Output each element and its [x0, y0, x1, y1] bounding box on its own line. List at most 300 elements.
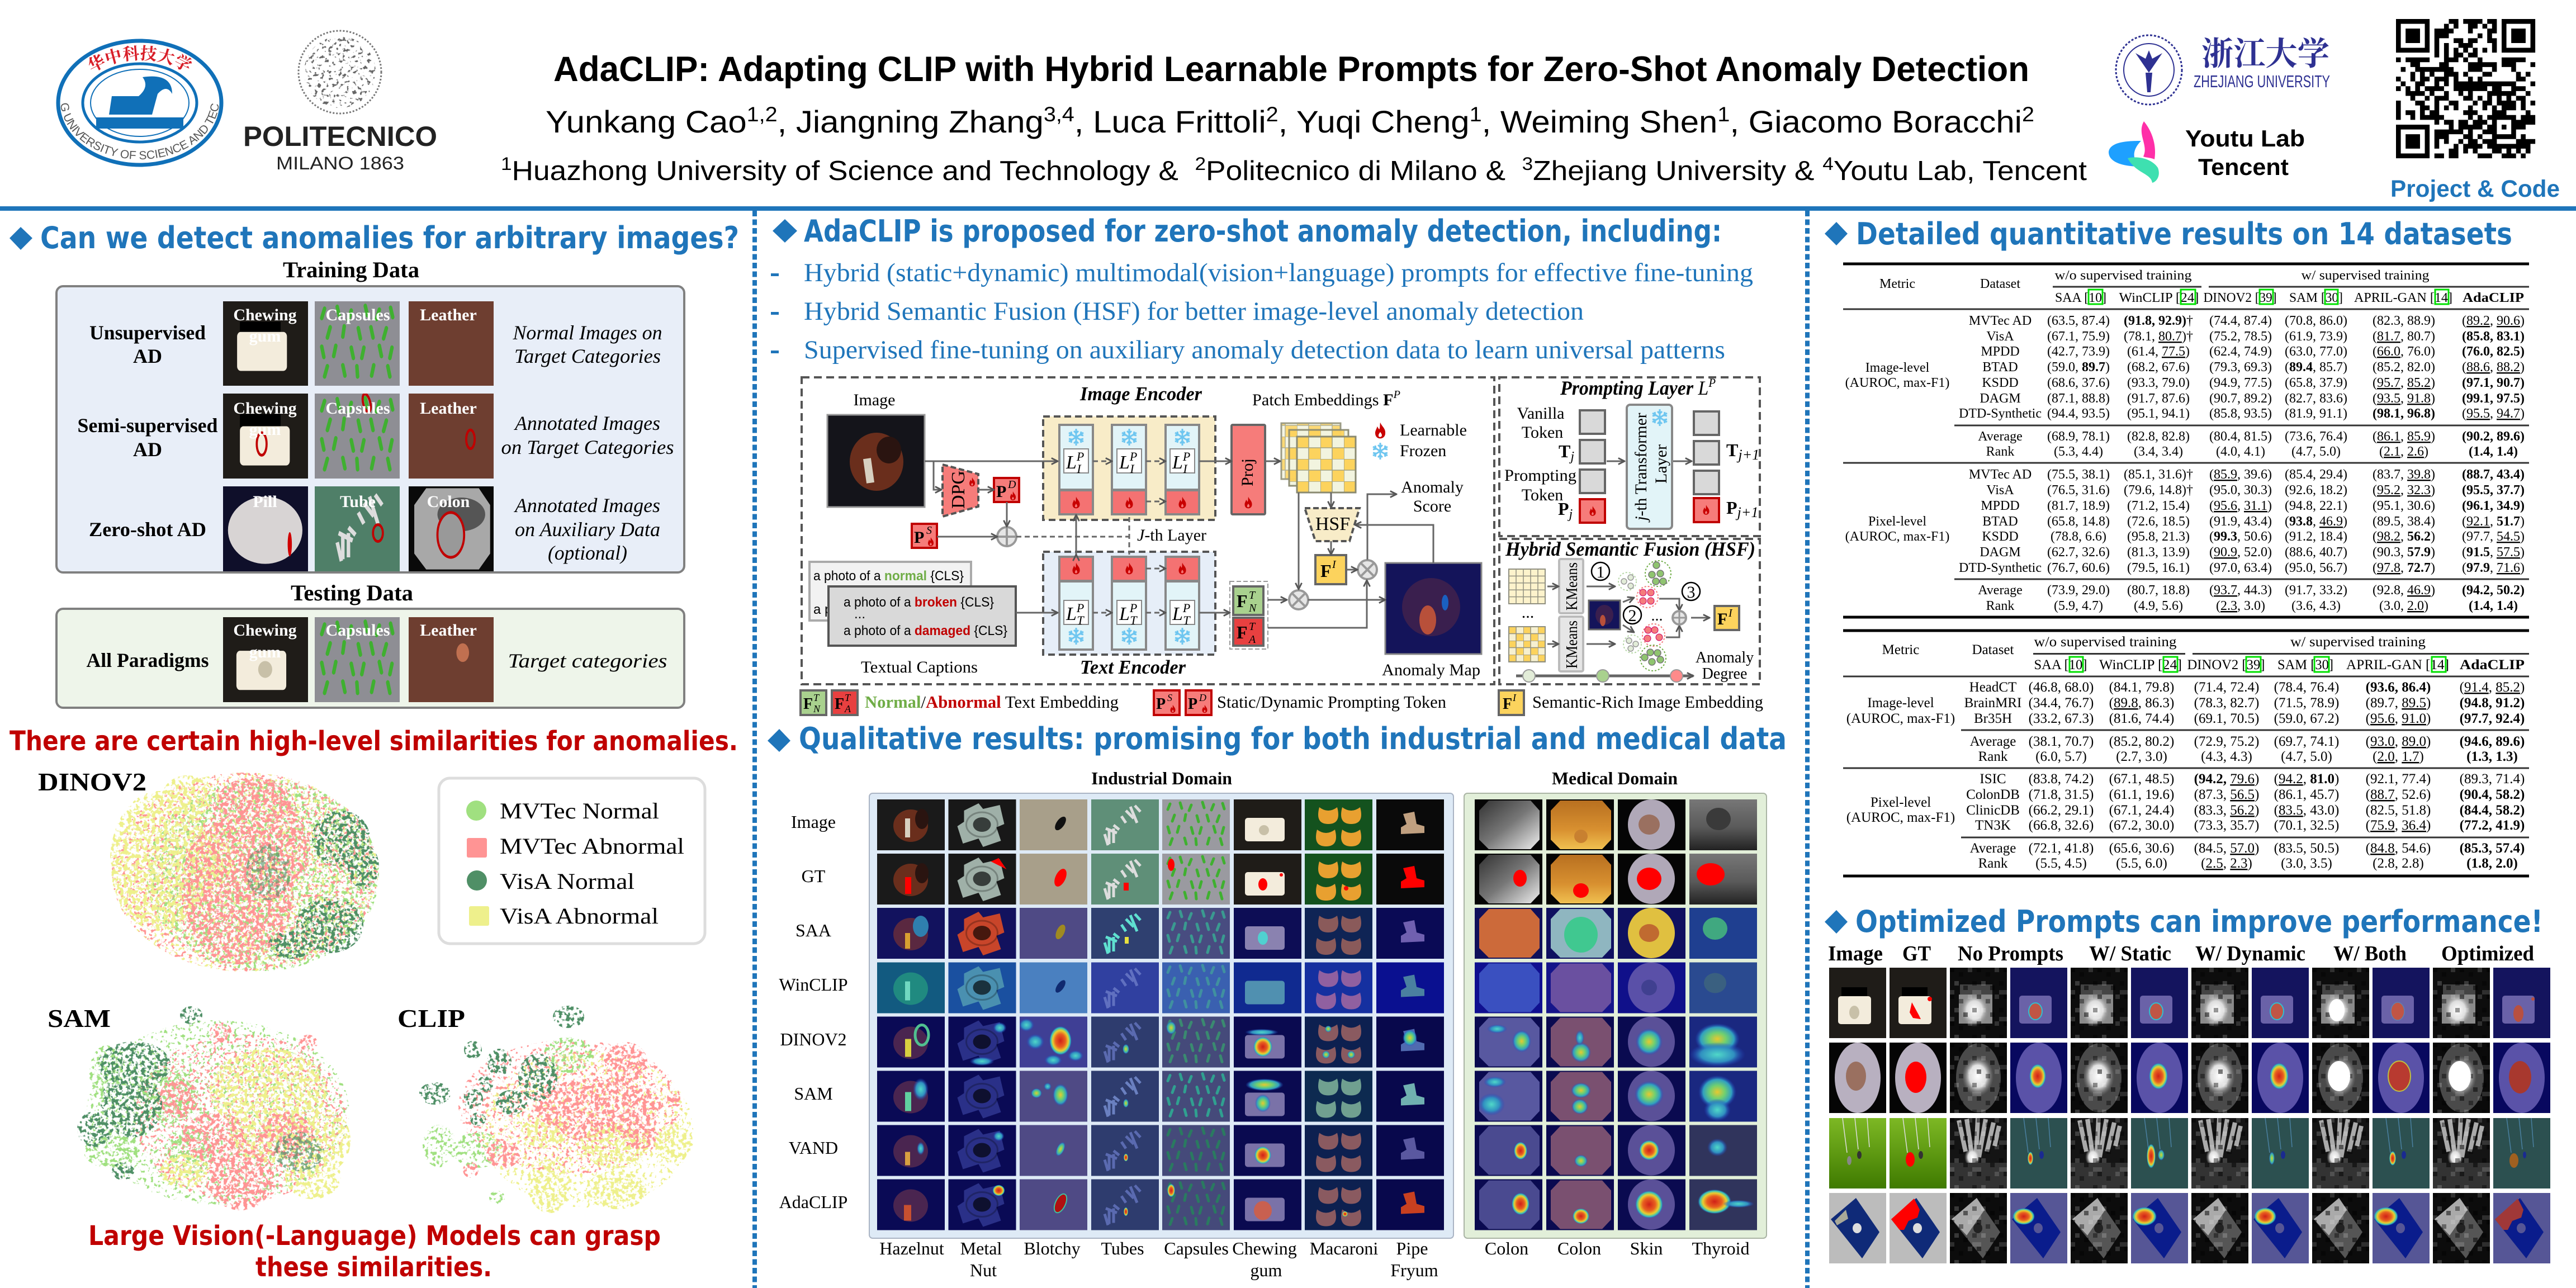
table: results on industrial and combined datasets: (95.0, 30.3)	[2209, 483, 2272, 498]
table: results on industrial and combined datasets: KSDD	[1982, 376, 2019, 390]
table: results on industrial and combined datasets: APRIL-GAN [14]	[2354, 291, 2452, 305]
table: results on industrial and combined datasets: (97.9, 71.6)	[2462, 561, 2525, 575]
table: results on industrial and combined datasets: (95.5, 37.7)	[2462, 483, 2525, 498]
table: results on medical datasets: (65.6, 30.6)	[2109, 841, 2174, 856]
training data box	[56, 286, 684, 572]
text encoder: P	[1076, 601, 1084, 615]
optimized prompts column labels: W/ Both	[2333, 942, 2407, 965]
table: results on medical datasets: (70.1, 32.5)	[2274, 818, 2339, 833]
row labels: DINOV2	[780, 1029, 847, 1049]
table: results on industrial and combined datasets: (3.6, 4.3)	[2291, 599, 2341, 613]
table: results on industrial and combined datasets: (91.2, 18.4)	[2285, 529, 2347, 544]
diagram legend row	[801, 690, 1763, 715]
bullet list: Hybrid (static+dynamic) multimodal(vision+language) prompts for effective fine-tuning	[804, 258, 1753, 287]
column labels: Hazelnut	[879, 1238, 944, 1258]
callout: large vision language models: Large Vision(-Language) Models can grasp	[88, 1220, 661, 1252]
token: dynamic prompt: D	[1007, 479, 1016, 491]
column labels: Colon	[1557, 1238, 1601, 1258]
table: results on medical datasets: (69.1, 70.5)	[2194, 711, 2259, 726]
diagram: AdaCLIP architecture	[801, 376, 1763, 715]
arrows	[925, 461, 1433, 628]
authors: 1	[1470, 103, 1482, 126]
affiliations: Politecnico di Milano &	[1206, 156, 1522, 186]
table: results on medical datasets: (67.2, 30.0)	[2109, 818, 2174, 833]
diagram legend row: F	[1503, 695, 1512, 713]
affiliations: Youtu Lab, Tencent	[1834, 156, 2087, 186]
panel: hybrid semantic fusion detail: Degree	[1702, 665, 1747, 683]
table: results on industrial and combined datasets: (1.4, 1.4)	[2469, 444, 2518, 459]
table: results on medical datasets: AdaCLIP	[2460, 657, 2525, 673]
table: results on industrial and combined datasets: (91.8, 92.9)†	[2124, 314, 2193, 328]
scatter plot: DINOV2	[110, 773, 379, 972]
authors: 1	[1717, 103, 1730, 126]
dynamic prompt generator: DPG	[948, 471, 969, 509]
table: results on industrial and combined datasets: (62.7, 32.6)	[2047, 545, 2110, 560]
table: results on medical datasets: (4.3, 4.3)	[2201, 749, 2252, 764]
table: results on medical datasets: WinCLIP [24]	[2099, 657, 2182, 673]
column labels: Pipe	[1396, 1238, 1428, 1258]
table: results on industrial and combined datasets: Dataset	[1980, 277, 2020, 291]
projection layer: Proj	[1238, 458, 1257, 486]
table: results on medical datasets: (85.2, 80.2)	[2109, 734, 2174, 749]
image row: ground truth	[877, 854, 1757, 905]
token: static prompt: P	[914, 528, 924, 547]
semantic image embedding: F	[1320, 561, 1332, 581]
domain headings: Medical Domain	[1552, 768, 1678, 788]
table: results on medical datasets: SAM [30]	[2277, 657, 2333, 673]
image encoder: P	[1129, 449, 1137, 463]
table: results on medical datasets: (5.5, 4.5)	[2035, 856, 2087, 871]
textual captions: a photo of a damaged {CLS}	[844, 623, 1007, 638]
text encoder: P	[1129, 601, 1137, 615]
table: results on medical datasets: (46.8, 68.0)	[2029, 680, 2094, 695]
table: results on industrial and combined datasets: DTD-Synthetic	[1959, 561, 2042, 575]
textual captions: ...	[854, 607, 865, 622]
text encoder: L	[1066, 604, 1077, 624]
input image: Image	[854, 391, 895, 409]
table: results on medical datasets: (2.0, 1.7)	[2373, 749, 2424, 764]
scatter plot: CLIP	[419, 1006, 693, 1213]
affiliations: Zhejiang University &	[1533, 156, 1822, 186]
patch embeddings: P	[1393, 389, 1400, 401]
authors: 2	[1266, 103, 1278, 126]
table: results on industrial and combined datasets: (61.4, 77.5)	[2127, 344, 2190, 359]
table: results on industrial and combined datasets: (95.0, 56.7)	[2285, 561, 2347, 575]
table: results on industrial and combined datasets: (80.4, 81.5)	[2209, 429, 2272, 444]
panel: prompting layer: j	[1568, 507, 1573, 522]
optimized prompts row: diamond plate	[1829, 1193, 2550, 1263]
table: results on industrial and combined datasets: (78.8, 6.6)	[2051, 529, 2106, 544]
row: semi-supervised AD: Semi-supervised	[77, 414, 218, 437]
table: results on medical datasets: (6.0, 5.7)	[2035, 749, 2087, 764]
table: results on industrial and combined datasets: (90.9, 52.0)	[2209, 545, 2272, 560]
table: results on medical datasets: (84.1, 79.8)	[2109, 680, 2174, 695]
table: results on medical datasets: Dataset	[1972, 642, 2014, 657]
patch embeddings: Patch Embeddings F	[1252, 391, 1393, 409]
text encoder: Text Encoder	[1080, 656, 1186, 678]
logo: Huazhong University of Science and Technology	[56, 39, 224, 167]
table: results on industrial and combined datasets: (88.7, 43.4)	[2462, 467, 2525, 482]
table: results on industrial and combined datasets: Image-level	[1865, 361, 1930, 375]
table: results on industrial and combined datasets: DINOV2 [39]	[2204, 291, 2276, 305]
title: AdaCLIP: Adapting CLIP with Hybrid Learnable Prompts for Zero-Shot Anomaly Detection	[553, 50, 2029, 89]
panel: prompting layer: j-th Transformer	[1632, 413, 1650, 523]
table: results on industrial and combined datasets: (90.2, 89.6)	[2462, 429, 2525, 444]
table: results on industrial and combined datasets: (97.7, 54.5)	[2462, 529, 2525, 544]
hybrid semantic fusion block	[1305, 508, 1360, 541]
table: results on industrial and combined datasets: DAGM	[1980, 391, 2021, 406]
row: zero-shot AD: Annotated Images	[514, 494, 660, 517]
text encoder: T	[1183, 613, 1191, 627]
row: unsupervised AD: gum	[249, 327, 281, 345]
column labels: Thyroid	[1692, 1238, 1750, 1258]
table: results on medical datasets: (1.8, 2.0)	[2466, 856, 2518, 871]
table: results on industrial and combined datasets: (95.5, 94.7)	[2462, 406, 2525, 421]
row: unsupervised AD	[89, 301, 662, 386]
panel: left column problem statement	[10, 220, 739, 1283]
token: static prompt	[912, 524, 937, 548]
panel: hybrid semantic fusion detail: 1	[1597, 563, 1604, 581]
table: results on medical datasets: (78.3, 82.7)	[2194, 695, 2259, 711]
table: results on medical datasets: (93.0, 89.0)	[2366, 734, 2431, 749]
table: results on industrial and combined datasets: (4.0, 4.1)	[2216, 444, 2265, 459]
table: results on medical datasets: (2.7, 3.0)	[2116, 749, 2167, 764]
panel: hybrid semantic fusion detail: 3	[1687, 583, 1695, 602]
table: results on industrial and combined datasets: (68.2, 67.6)	[2127, 360, 2190, 375]
heading: qualitative results: Qualitative results: promising for both industrial and medical data	[799, 721, 1787, 756]
table: results on medical datasets: (95.6, 91.0)	[2366, 711, 2431, 726]
table: results on medical datasets: (83.5, 50.5)	[2274, 841, 2339, 856]
table: results on medical datasets: w/o supervised training	[2034, 634, 2177, 650]
table: results on industrial and combined datasets: (95.1, 94.1)	[2127, 406, 2190, 421]
table: results on industrial and combined datasets: Pixel-level	[1868, 514, 1926, 529]
table: results on industrial and combined datasets: w/o supervised training	[2055, 268, 2191, 283]
affiliations: 1	[501, 154, 512, 174]
panel: medical domain background	[1464, 793, 1767, 1238]
heading: can we detect anomalies: Can we detect anomalies for arbitrary images?	[40, 220, 739, 255]
table: results on industrial and combined datasets: (81.3, 13.9)	[2127, 545, 2190, 560]
panel: hybrid semantic fusion detail: Hybrid Semantic Fusion (HSF)	[1505, 538, 1755, 560]
table: results on medical datasets: (85.3, 57.4)	[2460, 841, 2525, 856]
table: results on industrial and combined datasets: (76.0, 82.5)	[2462, 344, 2525, 359]
dynamic prompt generator	[943, 465, 978, 517]
testing data box: Chewing	[233, 621, 297, 640]
image row: DINOV2	[877, 1016, 1757, 1068]
table: results on industrial and combined datasets: (66.0, 76.0)	[2373, 344, 2435, 359]
table: results on industrial and combined datasets: (95.2, 32.3)	[2373, 483, 2435, 498]
row: semi-supervised AD: on Target Categories	[501, 436, 674, 458]
table: results on industrial and combined datasets: (86.1, 85.9)	[2373, 429, 2435, 444]
table: results on medical datasets: (89.8, 86.3)	[2109, 695, 2174, 711]
table: results on industrial and combined datasets: (85.8, 93.5)	[2209, 406, 2272, 421]
logo: Youtu Lab Tencent: Tencent	[2198, 154, 2289, 180]
table: results on industrial and combined datasets: MVTec AD	[1969, 467, 2032, 482]
legend: MVTec and VisA classes	[439, 778, 705, 944]
panel: hybrid semantic fusion detail: I	[1728, 607, 1733, 619]
authors: Yunkang Cao	[546, 104, 733, 139]
table: results on industrial and combined datasets: DAGM	[1980, 545, 2021, 560]
table: results on medical datasets: (86.1, 45.7)	[2274, 787, 2339, 802]
table: results on industrial and combined datasets: (63.0, 77.0)	[2285, 344, 2347, 359]
image encoder: I	[1182, 462, 1188, 476]
table: results on medical datasets: APRIL-GAN [14]	[2346, 657, 2449, 673]
table: results on medical datasets: Br35H	[1974, 711, 2012, 726]
table: results on industrial and combined datasets: (93.8, 46.9)	[2285, 514, 2347, 529]
row: unsupervised AD: Capsules	[325, 306, 390, 324]
row labels: Image	[791, 812, 836, 832]
table: results on medical datasets: (67.1, 24.4)	[2109, 803, 2174, 818]
domain headings: Industrial Domain	[1091, 768, 1232, 788]
row: semi-supervised AD: Capsules	[325, 399, 390, 418]
table: results on industrial and combined datasets: (88.6, 40.7)	[2285, 545, 2347, 560]
testing data box: Target categories	[508, 650, 667, 672]
table: results on industrial and combined datasets: (76.5, 31.6)	[2047, 483, 2110, 498]
row: semi-supervised AD: AD	[133, 438, 162, 461]
table: results on medical datasets: (AUROC, max-F1)	[1846, 810, 1955, 825]
column labels: gum	[1251, 1260, 1282, 1280]
legend: MVTec and VisA classes: MVTec Abnormal	[500, 834, 684, 859]
legend: learnable and frozen: Frozen	[1400, 442, 1446, 460]
table: results on industrial and combined datasets: (95.1, 30.6)	[2373, 499, 2435, 513]
image row: input images	[877, 799, 1757, 850]
logo: Politecnico di Milano	[243, 31, 437, 173]
textual captions: Textual Captions	[861, 658, 978, 676]
image row: VAND	[877, 1125, 1757, 1176]
table: results on medical datasets: (94.2, 79.6)	[2194, 771, 2259, 787]
table: results on industrial and combined datasets: (85.4, 29.4)	[2285, 467, 2347, 482]
table: results on medical datasets: (89.3, 71.4)	[2460, 771, 2525, 787]
table: results on industrial and combined datasets: (85.2, 82.0)	[2373, 360, 2435, 375]
table: results on industrial and combined datasets: (87.1, 88.8)	[2047, 391, 2110, 406]
table: results on industrial and combined datasets: (94.2, 50.2)	[2462, 583, 2525, 598]
table: results on medical datasets: Pixel-level	[1871, 795, 1931, 810]
table: results on industrial and combined datasets: (61.9, 73.9)	[2285, 329, 2347, 344]
authors: 3,4	[1044, 103, 1074, 126]
table: results on medical datasets: (1.3, 1.3)	[2466, 749, 2518, 764]
table: results on medical datasets	[1843, 631, 2529, 876]
table: results on industrial and combined datasets: (81.7, 80.7)	[2373, 329, 2435, 344]
text encoder: T	[1077, 613, 1085, 627]
table: results on industrial and combined datasets: MPDD	[1981, 499, 2020, 513]
column labels: Fryum	[1390, 1260, 1438, 1280]
table: results on medical datasets: (91.4, 85.2)	[2460, 680, 2525, 695]
table: results on industrial and combined datasets: (1.4, 1.4)	[2469, 599, 2518, 613]
affiliations: 3	[1522, 154, 1533, 174]
panel: prompting layer: Prompting Layer L	[1560, 377, 1710, 399]
table: results on medical datasets: (2.5, 2.3)	[2201, 856, 2252, 871]
panel: prompting layer: j	[1569, 449, 1574, 464]
callout: large vision language models	[88, 1220, 661, 1283]
diagram legend row: T	[845, 692, 851, 703]
panel: hybrid semantic fusion detail: Anomaly	[1696, 649, 1754, 666]
table: results on industrial and combined datasets: (71.2, 15.4)	[2127, 499, 2190, 513]
table: results on medical datasets: (83.8, 74.2)	[2029, 771, 2094, 787]
optimized prompts column labels: W/ Dynamic	[2195, 942, 2305, 965]
domain headings	[1091, 768, 1678, 788]
legend: MVTec and VisA classes: MVTec Normal	[500, 798, 659, 823]
panel: prompting layer: T	[1559, 441, 1570, 461]
scatter label: DINOV2: DINOV2	[38, 768, 146, 796]
table: results on industrial and combined datasets: (85.8, 83.1)	[2462, 329, 2525, 344]
table: results on industrial and combined datasets: (91.7, 87.6)	[2127, 391, 2190, 406]
scatter label: SAM: SAM	[48, 1004, 111, 1033]
table: results on industrial and combined datasets: KSDD	[1982, 529, 2019, 544]
table: results on industrial and combined datasets: (91.5, 57.5)	[2462, 545, 2525, 560]
table: results on medical datasets: (94.2, 81.0)	[2274, 771, 2339, 787]
image row: AdaCLIP	[877, 1180, 1757, 1230]
table: results on industrial and combined datasets: BTAD	[1982, 514, 2018, 529]
table: results on medical datasets: (83.3, 56.2)	[2194, 803, 2259, 818]
training data heading: Training Data	[283, 257, 419, 282]
panel: hybrid semantic fusion detail: ...	[1522, 603, 1534, 622]
row: zero-shot AD: on Auxiliary Data	[515, 518, 660, 541]
diagram legend row: F	[835, 695, 844, 713]
table: results on industrial and combined datasets: (75.5, 38.1)	[2047, 467, 2110, 482]
authors: , Yuqi Cheng	[1278, 104, 1470, 139]
authors: , Luca Frittoli	[1074, 104, 1266, 139]
panel: hybrid semantic fusion detail: ...	[1651, 607, 1663, 624]
row labels: VAND	[789, 1138, 838, 1158]
panel: prompting layer: Vanilla	[1517, 404, 1564, 423]
panel: prompting layer: Layer	[1652, 444, 1670, 484]
table: results on industrial and combined datasets: WinCLIP [24]	[2119, 291, 2199, 305]
panel: prompting layer: j+1	[1736, 447, 1759, 463]
diagram legend row: A	[844, 703, 851, 714]
authors: , Jiangning Zhang	[778, 104, 1044, 139]
table: results on industrial and combined datasets: (91.9, 43.4)	[2209, 514, 2272, 529]
optimized prompts column labels: No Prompts	[1958, 942, 2063, 965]
image encoder: Image Encoder	[1079, 383, 1202, 405]
table: results on industrial and combined datasets: BTAD	[1982, 360, 2018, 375]
text encoder	[1043, 552, 1215, 678]
table: results on medical datasets: (84.4, 58.2)	[2460, 803, 2525, 818]
table: results on medical datasets: (4.7, 5.0)	[2281, 749, 2332, 764]
panel: prompting layer: P	[1708, 376, 1716, 390]
row labels: GT	[802, 866, 826, 886]
table: results on industrial and combined datasets: (99.3, 50.6)	[2209, 529, 2272, 544]
table: results on industrial and combined datasets: (79.5, 16.1)	[2127, 561, 2190, 575]
textual captions: a photo of a broken {CLS}	[844, 595, 994, 610]
project and code link: Project & Code	[2390, 176, 2560, 202]
table: results on industrial and combined datasets: VisA	[1986, 483, 2014, 498]
row labels: AdaCLIP	[779, 1192, 847, 1212]
table: results on industrial and combined datasets: (AUROC, max-F1)	[1845, 376, 1949, 390]
column labels: Tubes	[1101, 1238, 1144, 1258]
table: results on medical datasets: (94.8, 91.2)	[2460, 695, 2525, 711]
table: results on industrial and combined datasets: (96.1, 34.9)	[2462, 499, 2525, 513]
optimized prompts column labels: Optimized	[2441, 942, 2534, 965]
table: results on medical datasets: (97.7, 92.4)	[2460, 711, 2525, 726]
row labels: SAM	[794, 1083, 833, 1104]
table: results on industrial and combined datasets: (93.3, 79.0)	[2127, 376, 2190, 390]
row: semi-supervised AD: Leather	[420, 399, 477, 418]
table: results on industrial and combined datasets: (82.3, 88.9)	[2373, 314, 2435, 328]
table: results on medical datasets: (84.5, 57.0)	[2194, 841, 2259, 856]
table: results on medical datasets: (94.6, 89.6)	[2460, 734, 2525, 749]
legend: learnable and frozen	[1373, 421, 1467, 460]
logo: Huazhong University of Science and Technology: 华中科技大学	[88, 45, 192, 70]
table: results on industrial and combined datasets: MVTec AD	[1969, 314, 2032, 328]
table: results on medical datasets: BrainMRI	[1964, 695, 2021, 711]
table: results on industrial and combined datasets: Average	[1978, 429, 2023, 444]
table: results on industrial and combined datasets: (68.9, 78.1)	[2047, 429, 2110, 444]
table: results on medical datasets: (AUROC, max-F1)	[1846, 711, 1955, 726]
table: results on industrial and combined datasets: (94.8, 22.1)	[2285, 499, 2347, 513]
table: results on industrial and combined datasets: (62.4, 74.9)	[2209, 344, 2272, 359]
panel: hybrid semantic fusion detail: KMeans	[1564, 562, 1581, 610]
image encoder: L	[1119, 452, 1130, 473]
table: results on industrial and combined datasets: (93.7, 44.3)	[2209, 583, 2272, 598]
logo: Zhejiang University: 浙江大学	[2201, 27, 2329, 74]
panel: prompting layer: T	[1726, 440, 1738, 460]
text encoder: P	[1182, 601, 1190, 615]
table: results on medical datasets: (72.9, 75.2)	[2194, 734, 2259, 749]
row: semi-supervised AD: Chewing	[233, 399, 297, 418]
optimized prompts row: chewing gum	[1829, 968, 2550, 1038]
table: results on industrial and combined datasets: w/ supervised training	[2301, 268, 2430, 283]
table: results on medical datasets: (67.1, 48.5)	[2109, 771, 2174, 787]
row labels	[779, 812, 848, 1212]
row: zero-shot AD: (optional)	[548, 542, 627, 564]
table: results on medical datasets: Metric	[1882, 642, 1919, 657]
row: semi-supervised AD: gum	[249, 420, 281, 439]
table: results on industrial and combined datasets: (2.3, 3.0)	[2216, 599, 2265, 613]
row labels: WinCLIP	[779, 974, 848, 995]
table: results on industrial and combined datasets: (4.7, 5.0)	[2291, 444, 2341, 459]
callout: large vision language models: these similarities.	[255, 1252, 492, 1283]
diagram legend row: N	[813, 703, 821, 714]
optimized prompts column labels: W/ Static	[2089, 942, 2171, 965]
table: results on medical datasets: (73.3, 35.7)	[2194, 818, 2259, 833]
table: results on medical datasets: Average	[1970, 734, 2016, 749]
table: results on industrial and combined datasets: (65.8, 37.9)	[2285, 376, 2347, 390]
table: results on industrial and combined datasets: (68.6, 37.6)	[2047, 376, 2110, 390]
operators	[997, 527, 1377, 609]
input image	[827, 391, 925, 507]
table: results on medical datasets: w/ supervised training	[2290, 634, 2426, 650]
table: results on industrial and combined datasets: (74.4, 87.4)	[2209, 314, 2272, 328]
panel: prompting layer	[1499, 376, 1760, 536]
table: results on industrial and combined datasets: (95.8, 21.3)	[2127, 529, 2190, 544]
text encoder: T	[1130, 613, 1138, 627]
column labels: Blotchy	[1024, 1238, 1081, 1258]
column labels: Colon	[1485, 1238, 1528, 1258]
row: zero-shot AD: Pill	[253, 493, 277, 511]
table: results on industrial and combined datasets: DTD-Synthetic	[1959, 406, 2042, 421]
affiliations: 4	[1822, 154, 1834, 174]
row: unsupervised AD: AD	[133, 345, 162, 367]
panel: AdaCLIP proposal	[768, 214, 2550, 1280]
table: results on medical datasets: (93.6, 86.4)	[2366, 680, 2431, 695]
row: unsupervised AD: Normal Images on	[513, 321, 662, 344]
panel: prompting layer: j+1	[1736, 504, 1758, 520]
table: results on industrial and combined datasets: (92.8, 46.9)	[2373, 583, 2435, 598]
table: results on medical datasets: (92.1, 77.4)	[2366, 771, 2431, 787]
table: results on industrial and combined datasets: (2.1, 2.6)	[2379, 444, 2428, 459]
table: results on medical datasets: (83.5, 43.0)	[2274, 803, 2339, 818]
diagram legend row: D	[1199, 692, 1206, 703]
QR code	[2396, 21, 2535, 156]
panel: hybrid semantic fusion detail: 2	[1628, 607, 1637, 625]
panel: prompting layer: Prompting	[1504, 466, 1576, 485]
table: results on industrial and combined datasets: AdaCLIP	[2463, 291, 2524, 305]
panel: hybrid semantic fusion detail: KMeans	[1564, 621, 1581, 669]
table: results on medical datasets: (82.5, 51.8)	[2366, 803, 2431, 818]
column labels: Capsules	[1164, 1238, 1229, 1258]
column labels: Chewing	[1232, 1238, 1297, 1258]
table: results on industrial and combined datasets: (97.0, 63.4)	[2209, 561, 2272, 575]
table: results on industrial and combined datasets: (92.1, 51.7)	[2462, 514, 2525, 529]
